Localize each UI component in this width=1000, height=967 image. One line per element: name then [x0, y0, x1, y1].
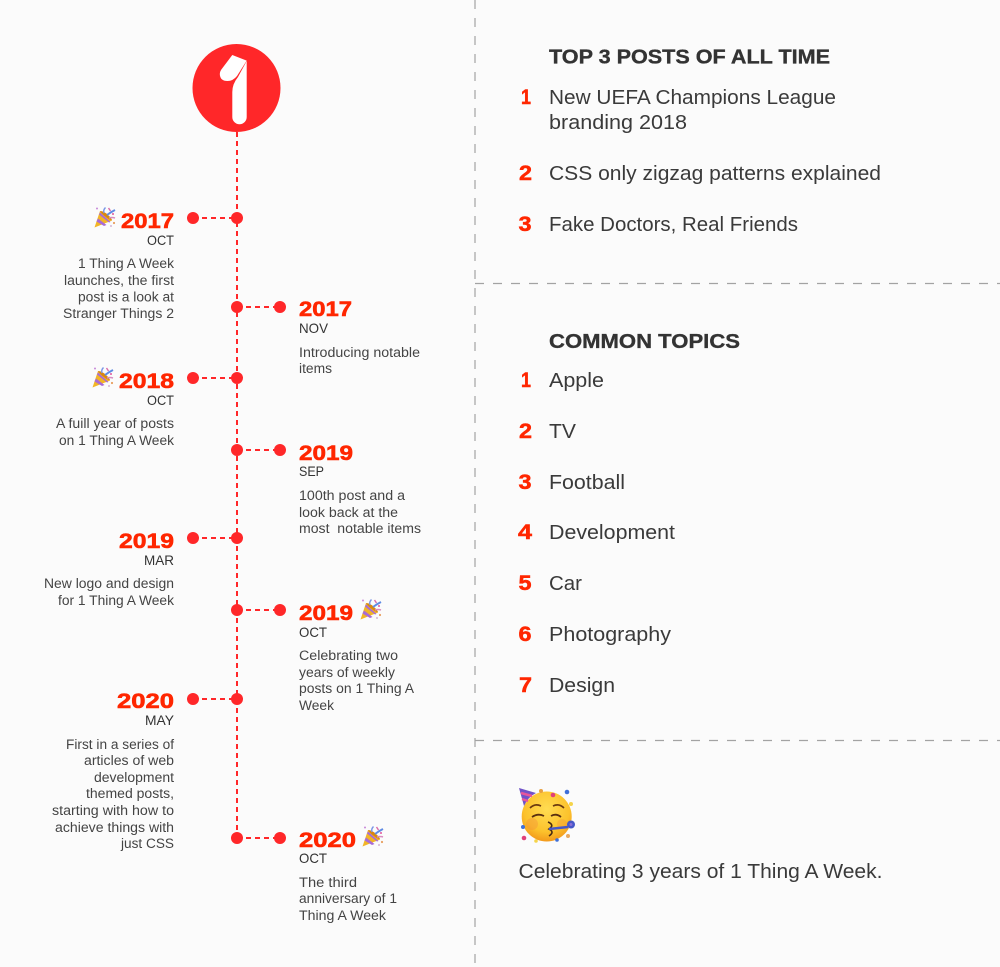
timeline entry: 2020 Oct: anniversary of 1	[299, 891, 397, 906]
list item 1: branding 2018	[549, 112, 687, 134]
list item 1: New UEFA Champions League	[549, 87, 836, 109]
timeline entry: 2020 Oct	[231, 826, 397, 923]
timeline entry: 2018 Oct: A fuill year of posts	[56, 416, 174, 431]
panel: celebration	[518, 788, 882, 883]
topic 2: TV	[549, 421, 577, 443]
panel: common topics	[518, 331, 740, 697]
topic 6: 6	[518, 623, 532, 646]
timeline entry: 2020 May: First in a series of	[66, 737, 174, 752]
timeline entry: 2017 Nov	[231, 297, 420, 376]
timeline entry: 2017 Nov: NOV	[299, 320, 329, 336]
timeline spine	[236, 132, 238, 838]
topic 3: Football	[549, 472, 625, 494]
icon: partying face	[519, 788, 575, 843]
topic 1: Apple	[549, 370, 604, 392]
topic 5	[518, 572, 582, 595]
timeline entry: 2020 May: starting with how to	[52, 803, 174, 818]
topic 3	[518, 471, 625, 494]
list item 2: CSS only zigzag patterns explained	[549, 163, 881, 185]
timeline entry: 2018 Oct: on 1 Thing A Week	[59, 433, 174, 448]
timeline entry: 2017 Oct: 2017	[121, 209, 174, 233]
icon: party popper	[362, 826, 383, 846]
topic 7: Design	[549, 675, 615, 697]
topic 4: 4	[518, 521, 532, 544]
icon: 1 Thing A Week logo	[192, 44, 280, 132]
timeline entry: 2017 Oct: Stranger Things 2	[63, 306, 174, 321]
list item 2: 2	[519, 162, 532, 185]
topic 3: 3	[518, 471, 532, 494]
timeline entry: 2018 Oct	[56, 368, 243, 448]
panel dividers	[475, 0, 1000, 967]
timeline entry: 2020 May: development	[94, 770, 174, 785]
timeline entry: 2019 Mar: MAR	[144, 552, 174, 568]
topic 5: Car	[549, 573, 582, 595]
timeline entry: 2020 May: achieve things with	[55, 820, 174, 835]
timeline entry: 2018 Oct: 2018	[119, 369, 174, 393]
heading: top 3 posts: TOP 3 POSTS OF ALL TIME	[549, 46, 830, 68]
timeline entry: 2020 Oct: The third	[299, 875, 357, 890]
timeline entry: 2019 Oct: posts on 1 Thing A	[299, 681, 414, 696]
topic 7	[519, 674, 615, 697]
timeline entry: 2017 Nov: Introducing notable	[299, 345, 420, 360]
topic 2	[519, 420, 577, 443]
timeline entry: 2017 Oct: OCT	[147, 232, 174, 248]
list item 1	[521, 86, 836, 134]
timeline entry: 2020 Oct: Thing A Week	[299, 908, 386, 923]
timeline entry: 2019 Sep: most notable items	[299, 521, 421, 536]
timeline entry: 2020 May: themed posts,	[86, 786, 174, 801]
timeline entry: 2019 Oct: Week	[299, 698, 334, 713]
timeline entry: 2017 Oct: post is a look at	[78, 290, 174, 304]
heading: common topics: COMMON TOPICS	[549, 331, 740, 353]
list item 3: 3	[518, 213, 532, 236]
timeline entry: 2019 Oct: OCT	[299, 624, 327, 640]
topic 6: Photography	[549, 624, 671, 646]
timeline entry: 2019 Sep: 2019	[299, 441, 353, 465]
timeline entry: 2020 May: MAY	[145, 712, 175, 728]
timeline entry: 2017 Nov: items	[299, 361, 332, 376]
timeline entry: 2020 May	[52, 689, 243, 851]
timeline entry: 2019 Sep: 100th post and a	[299, 488, 406, 503]
icon: party popper	[92, 368, 113, 388]
list item 1: 1	[521, 86, 531, 109]
timeline entry: 2018 Oct: OCT	[147, 392, 174, 408]
timeline entry: 2020 May: 2020	[117, 689, 174, 713]
topic 1: 1	[521, 369, 531, 392]
timeline entry: 2019 Mar: for 1 Thing A Week	[58, 593, 174, 608]
timeline entry: 2017 Oct	[63, 208, 243, 321]
topic 5: 5	[518, 572, 532, 595]
icon: party popper	[94, 208, 115, 228]
celebration text: Celebrating 3 years of 1 Thing A Week.	[518, 861, 882, 883]
timeline entry: 2020 Oct: 2020	[299, 828, 356, 852]
timeline entry: 2019 Mar: 2019	[119, 529, 174, 553]
timeline entry: 2019 Oct	[231, 600, 414, 713]
timeline entry: 2017 Oct: launches, the first	[64, 273, 174, 288]
timeline entry: 2019 Oct: years of weekly	[299, 665, 395, 680]
timeline entry: 2020 May: articles of web	[84, 753, 174, 768]
timeline entry: 2019 Sep: SEP	[299, 463, 324, 479]
timeline entry: 2017 Oct: 1 Thing A Week	[78, 256, 174, 271]
panel: top 3 posts	[518, 46, 881, 236]
timeline entry: 2020 May: just CSS	[120, 836, 174, 851]
topic 1	[521, 369, 604, 392]
list item 3: Fake Doctors, Real Friends	[549, 214, 798, 236]
topic 2: 2	[519, 420, 532, 443]
topic 4: Development	[549, 522, 675, 544]
timeline entry: 2019 Oct: Celebrating two	[299, 648, 398, 663]
timeline entry: 2019 Sep: look back at the	[299, 505, 398, 520]
timeline entry: 2019 Mar	[44, 529, 243, 608]
timeline entry: 2019 Sep	[231, 441, 421, 536]
topic 7: 7	[519, 674, 532, 697]
icon: party popper	[360, 600, 381, 620]
timeline entry: 2017 Nov: 2017	[299, 297, 352, 321]
timeline entry: 2019 Mar: New logo and design	[44, 576, 174, 591]
timeline entry: 2020 Oct: OCT	[299, 850, 327, 866]
timeline entry: 2019 Oct: 2019	[299, 601, 353, 625]
